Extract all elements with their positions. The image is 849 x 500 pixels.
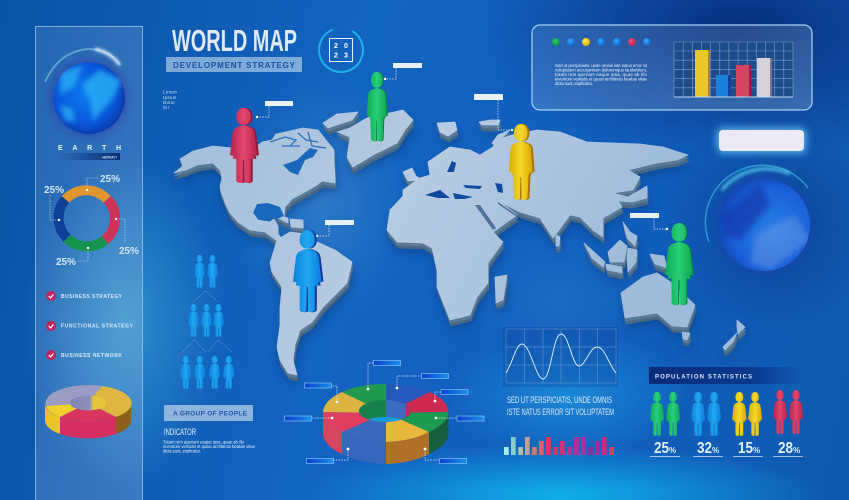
population values: % <box>712 446 719 455</box>
population statistics header: POPULATION STATISTICS <box>655 374 752 380</box>
chart hole <box>359 400 411 422</box>
population statistics header <box>649 367 804 384</box>
population values: 28 <box>778 440 793 457</box>
population values: % <box>753 446 760 455</box>
text: indicator: INDICATOR <box>164 427 196 437</box>
population values: 25 <box>654 440 669 457</box>
text: caption: ISTE NATUS ERROR SIT VOLUPTATEM <box>507 407 614 417</box>
population values <box>650 440 803 457</box>
label: abstract bar <box>58 153 120 160</box>
color dots <box>552 38 651 46</box>
person: red with callout <box>230 101 293 183</box>
lorem list: Ipsum <box>163 95 177 100</box>
person: yellow with callout <box>474 94 535 200</box>
text: indicator: Totam rem aperiam eaque ipsa, quae ab illo <box>163 440 245 444</box>
chart leaders <box>312 363 457 460</box>
heading: a group of people <box>164 405 253 421</box>
text: indicator: dicta sunt, explicabo. <box>163 448 201 454</box>
population values: 15 <box>738 440 753 457</box>
icon: right globe <box>705 165 812 273</box>
panel text: voluptatem accusantium doloremque laudantium, <box>555 68 647 72</box>
donut chart <box>59 190 115 246</box>
person: green female with callout <box>630 213 694 305</box>
text: earth label: EARTH <box>58 145 121 152</box>
lorem list: Lorem <box>163 90 177 94</box>
donut labels and leaders: 25% <box>44 185 64 196</box>
chart sides <box>323 412 448 464</box>
year badge <box>311 20 371 80</box>
chart label boxes <box>284 360 484 464</box>
year badge: 2 <box>334 52 338 60</box>
lorem list: Dolor <box>163 100 175 105</box>
title: WORLD MAP <box>172 23 297 58</box>
checklist: FUNCTIONAL STRATEGY <box>61 324 134 330</box>
people hierarchy <box>180 255 234 389</box>
text: indicator: inventore veritatis et quasi architecto beatae vitae <box>163 444 256 449</box>
panel: top right chart panel <box>532 25 812 110</box>
donut labels and leaders: 25% <box>100 174 120 185</box>
text: indicator <box>163 427 256 454</box>
icon: earth globe <box>45 49 128 137</box>
panel text <box>555 63 648 86</box>
bar chart <box>674 42 793 98</box>
heading: a group of people: A GROUP OF PEOPLE <box>173 410 248 418</box>
3d pie chart <box>45 385 132 438</box>
lorem list: Sit <box>163 105 170 110</box>
lorem list <box>163 90 177 110</box>
title <box>166 23 302 72</box>
label: abstract bar: ABSTRACT <box>102 154 117 160</box>
panel text: Sed ut perspiciatis, unde omnis iste natus error sit <box>555 63 648 68</box>
text: caption <box>507 395 614 417</box>
year badge: 0 <box>344 43 348 50</box>
population values: % <box>793 446 800 455</box>
donut labels and leaders: 25% <box>119 246 139 257</box>
year badge: 2 <box>334 43 338 50</box>
population values: 32 <box>697 440 712 457</box>
population values: % <box>669 446 676 455</box>
donut labels and leaders <box>44 174 139 268</box>
3d donut chart with labels <box>284 360 484 464</box>
panel text: totam rem aperiam eaque ipsa, quae ab illo <box>555 72 648 77</box>
glowing white label <box>717 128 806 153</box>
checklist: BUSINESS NETWORK <box>61 353 122 359</box>
year badge: 3 <box>344 52 348 60</box>
text: caption: SED UT PERSPICIATIS, UNDE OMNIS <box>507 395 612 405</box>
person: blue with callout <box>293 220 354 312</box>
panel text: inventore veritatis et quasi architecto beatae vitae <box>555 76 648 82</box>
small bar chart <box>504 437 614 455</box>
line chart <box>503 327 618 387</box>
panel text: dicta sunt, explicabo. <box>555 81 593 86</box>
subtitle banner: DEVELOPMENT STRATEGY <box>173 61 296 70</box>
chart top segments <box>323 384 448 442</box>
checklist <box>46 291 134 360</box>
population figures <box>650 390 803 436</box>
person: green with callout <box>367 63 422 141</box>
donut labels and leaders: 25% <box>56 257 76 268</box>
panel: left earth sidebar <box>36 26 142 500</box>
checklist: BUSINESS STRATEGY <box>61 294 123 300</box>
world map <box>174 110 747 384</box>
